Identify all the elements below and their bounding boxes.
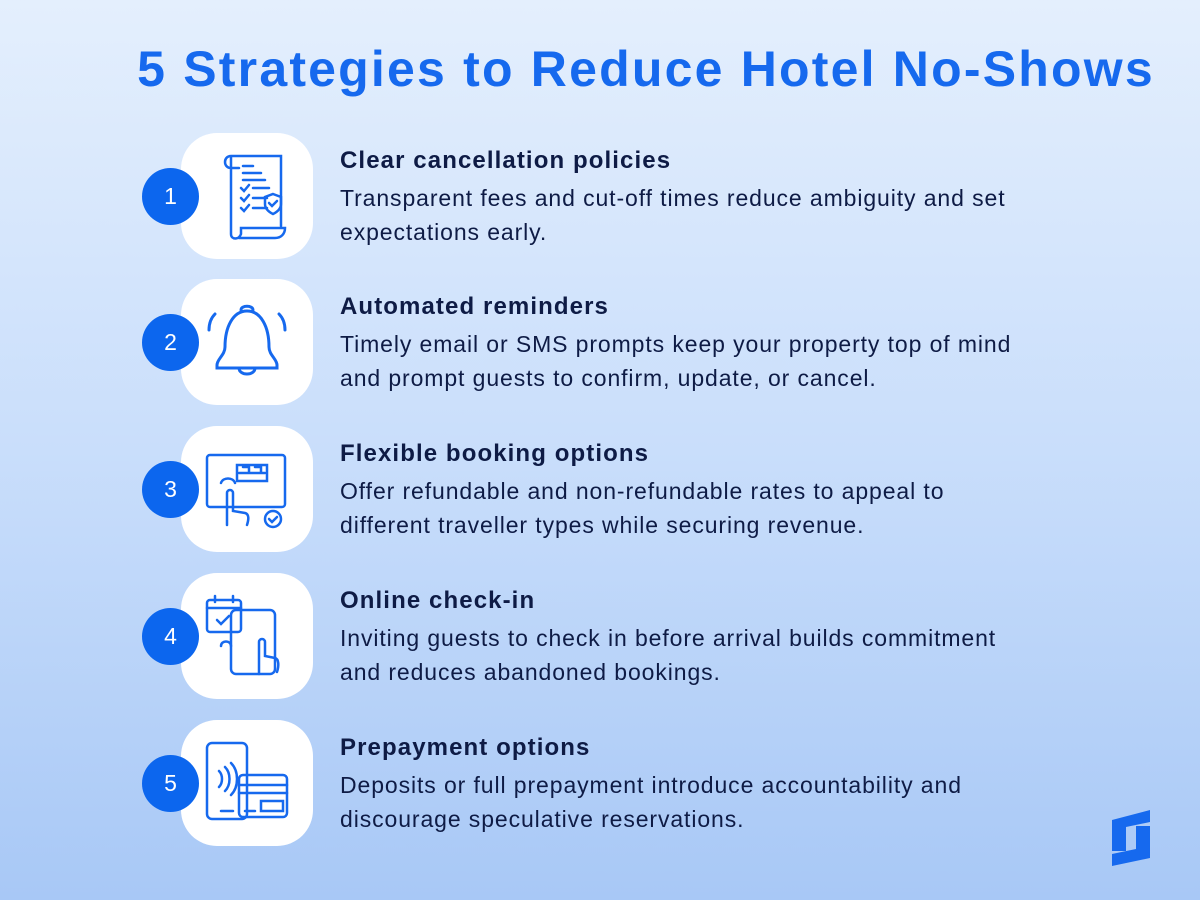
heading: Automated reminders [340, 293, 609, 320]
item 2 [142, 279, 1011, 405]
heading: Clear cancellation policies [340, 147, 671, 174]
description: Deposits or full prepayment introduce accountability and discourage speculative reservations. [340, 772, 962, 832]
number badge 3 [142, 461, 199, 518]
number badge 4: 4 [164, 623, 177, 649]
description: Timely email or SMS prompts keep your property top of mind and prompt guests to confirm, update, or cancel. [340, 331, 1011, 391]
number badge 4 [142, 608, 199, 665]
description: Inviting guests to check in before arrival builds commitment and reduces abandoned bookings. [340, 625, 996, 685]
icon card: phone and wallet [181, 720, 313, 846]
icon card: booking screen [181, 426, 313, 552]
heading: Flexible booking options [340, 440, 649, 467]
item 5 [142, 720, 962, 846]
item 3 [142, 426, 944, 552]
description: Offer refundable and non-refundable rates to appeal to different traveller types while securing revenue. [340, 478, 944, 538]
number badge 2 [142, 314, 199, 371]
logo [1112, 810, 1150, 866]
heading: Prepayment options [340, 734, 591, 761]
icon card: bell [181, 279, 313, 405]
number badge 2: 2 [164, 329, 177, 355]
title: 5 Strategies to Reduce Hotel No-Shows [137, 41, 1155, 97]
number badge 1: 1 [164, 183, 177, 209]
number badge 1 [142, 168, 199, 225]
number badge 5 [142, 755, 199, 812]
description: Transparent fees and cut-off times reduce ambiguity and set expectations early. [340, 185, 1006, 245]
icon card: calendar and phone [181, 573, 313, 699]
heading: Online check-in [340, 587, 535, 614]
item 1 [142, 133, 1006, 259]
number badge 3: 3 [164, 476, 177, 502]
item 4 [142, 573, 996, 699]
icon card: policy scroll [181, 133, 313, 259]
number badge 5: 5 [164, 770, 177, 796]
